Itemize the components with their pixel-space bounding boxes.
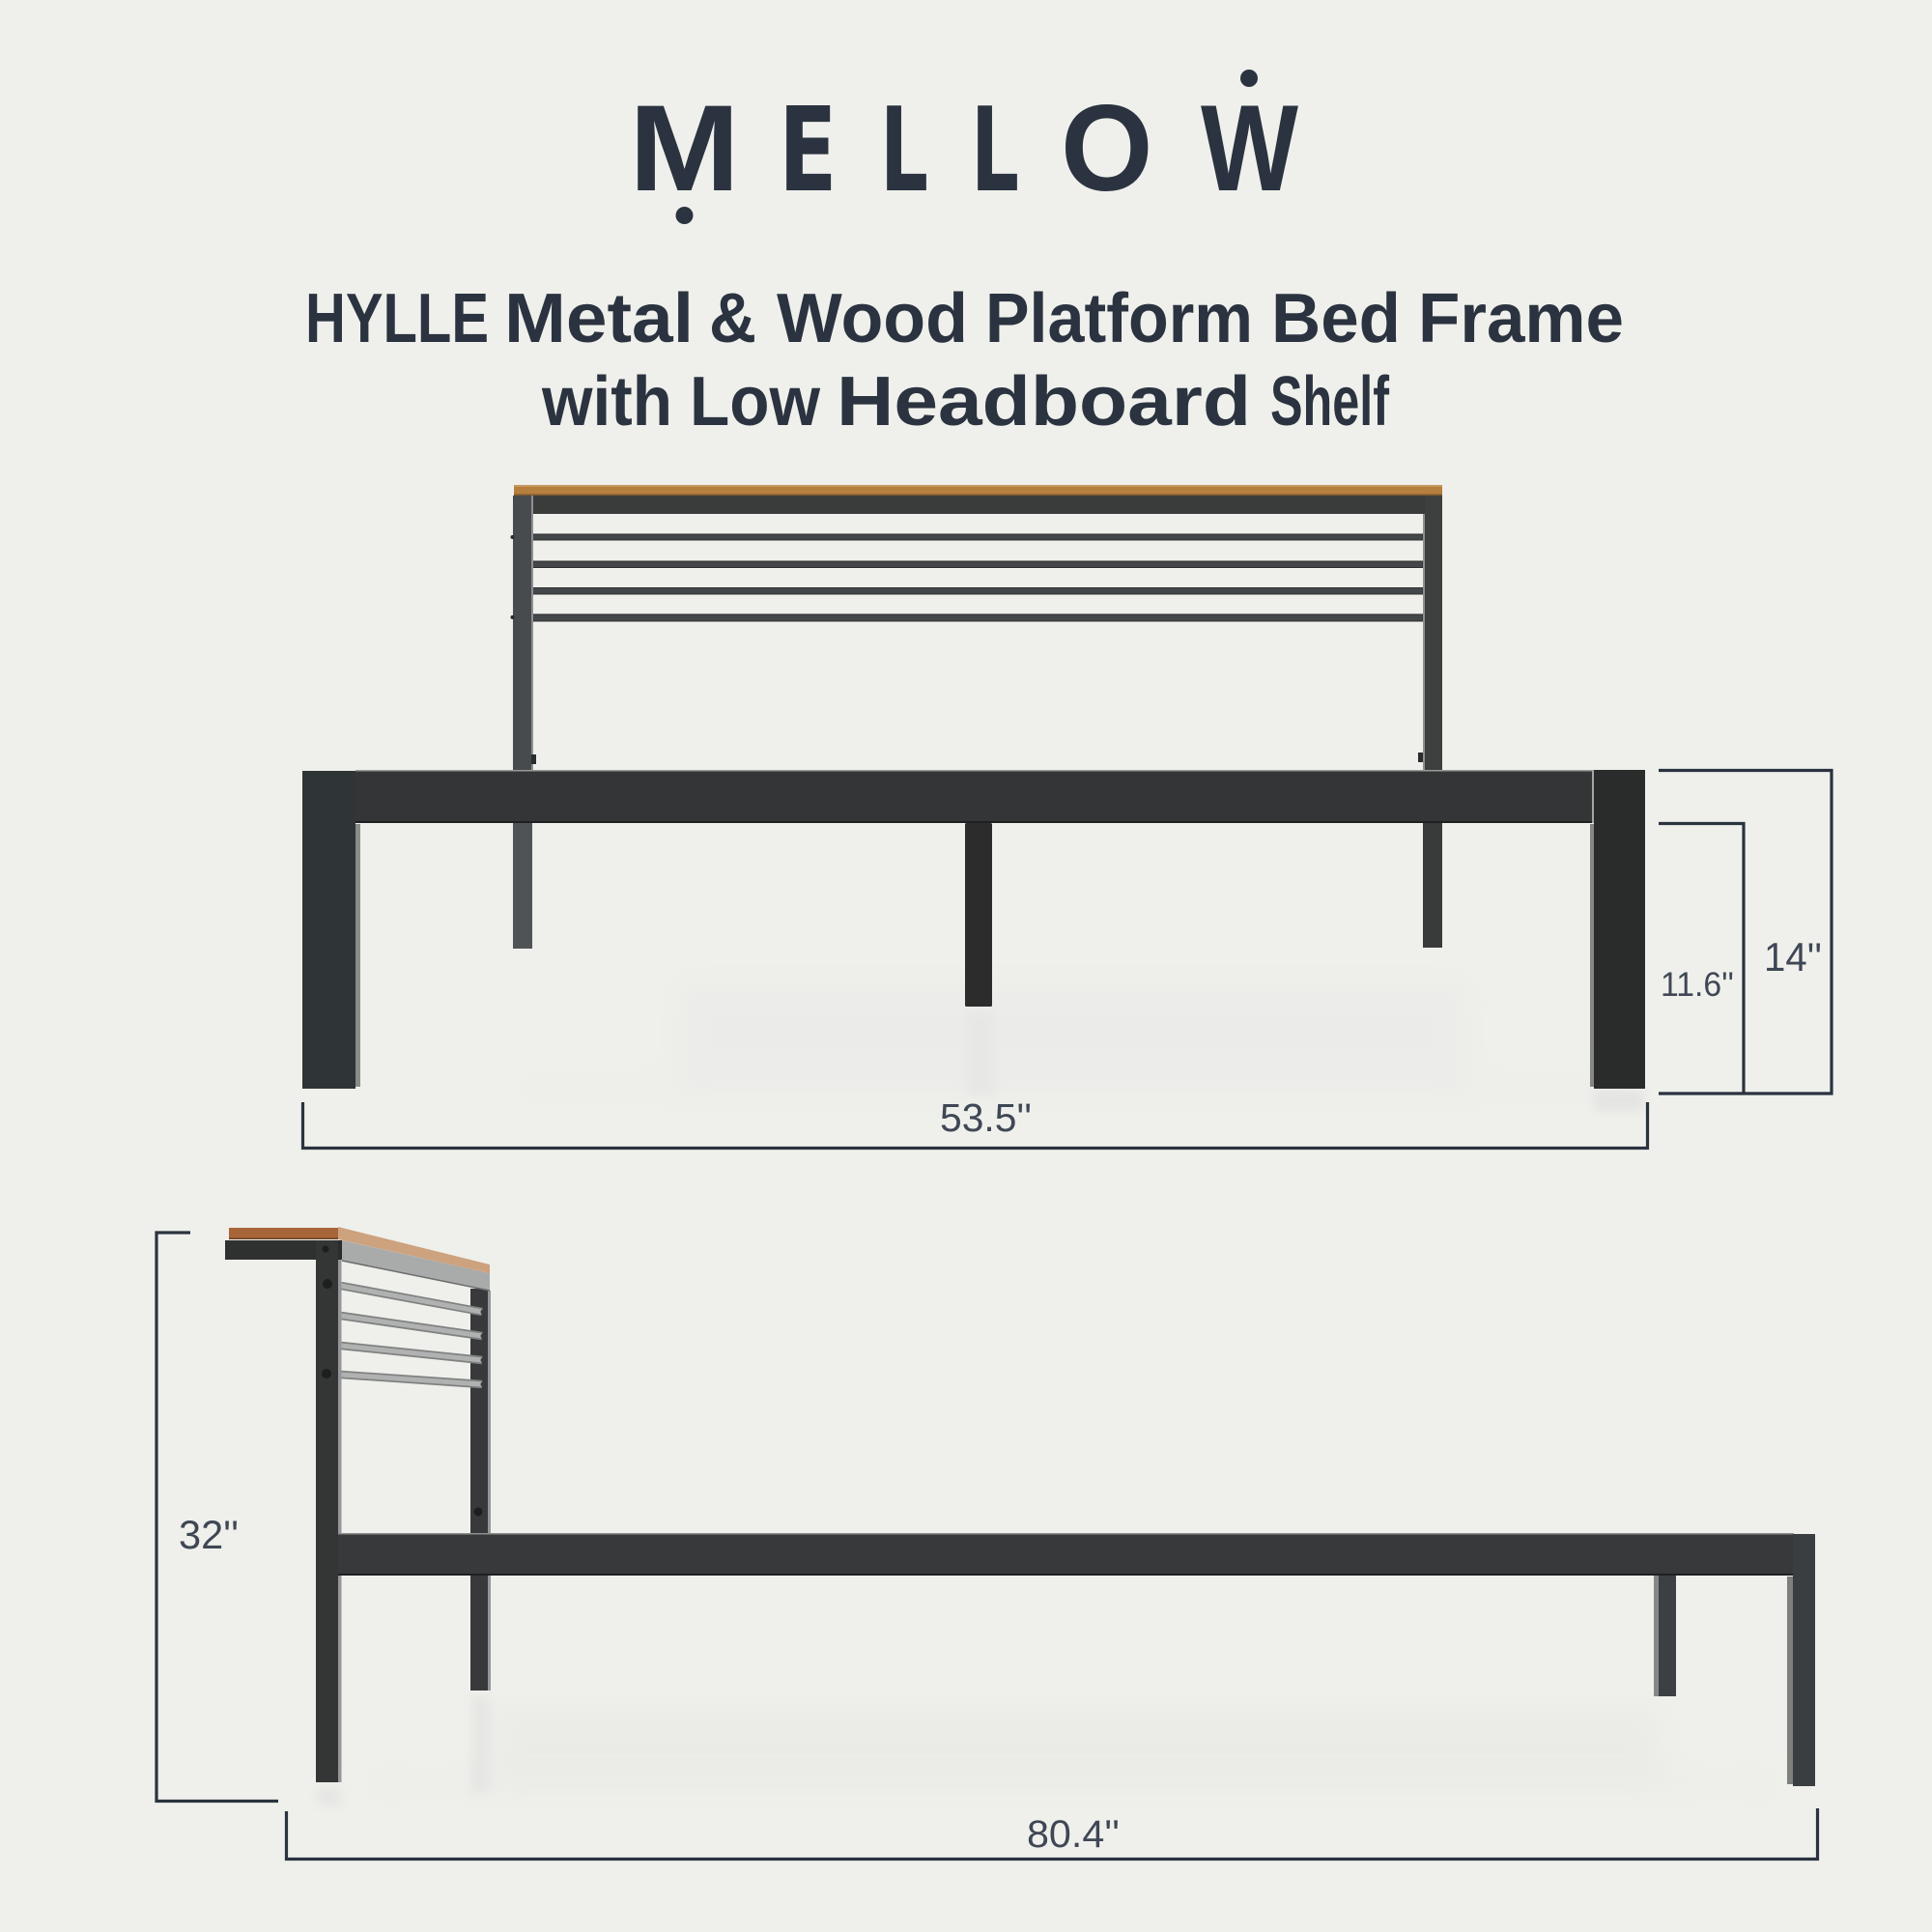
title: HYLLE <box>305 280 489 357</box>
title <box>305 280 1624 440</box>
logo: MELLOW wordmark: O <box>1061 79 1153 216</box>
title: & <box>709 280 756 357</box>
title: with <box>541 363 672 440</box>
dimension: clearance 11.6: 11.6'' <box>1661 966 1734 1004</box>
leg reflections <box>317 1696 491 1806</box>
rear inner legs <box>513 823 1442 949</box>
dimension: clearance 11.6 <box>1659 823 1744 1094</box>
wood shelf perspective <box>338 1227 490 1273</box>
logo: MELLOW wordmark: L <box>971 84 1019 218</box>
title: Wood <box>777 280 968 357</box>
angled slats <box>341 1286 482 1384</box>
far right leg <box>1787 1534 1815 1786</box>
dimension: height 14 <box>1659 771 1832 1094</box>
headboard <box>510 485 1442 770</box>
dimension: width 53.5: 53.5'' <box>940 1095 1032 1140</box>
dimension: headboard height 32 <box>156 1233 278 1801</box>
dimension: width 53.5 <box>303 1095 1648 1148</box>
wood shelf front <box>229 1228 338 1239</box>
title: Shelf <box>1270 363 1390 440</box>
title: Low <box>690 363 821 440</box>
title: Frame <box>1418 280 1624 357</box>
dimension: length 80.4: 80.4'' <box>1027 1813 1120 1856</box>
grey top bar <box>342 1240 490 1291</box>
headboard posts <box>513 496 1442 770</box>
shelf bracket <box>225 1240 338 1260</box>
rear headboard post <box>470 1289 488 1690</box>
dimension: length 80.4 <box>286 1808 1818 1859</box>
headboard top bar <box>531 496 1425 514</box>
side rail <box>338 1534 1794 1576</box>
title: Bed <box>1271 280 1401 357</box>
right front leg <box>1590 770 1645 1089</box>
dimension: height 14: 14'' <box>1764 934 1822 980</box>
logo: MELLOW wordmark: E <box>779 84 838 218</box>
center leg shadow <box>966 1012 995 1094</box>
title: Headboard <box>837 363 1251 440</box>
logo: MELLOW wordmark: L <box>880 84 928 218</box>
front view of bed frame <box>302 485 1645 1111</box>
dimension: headboard height 32: 32'' <box>179 1512 239 1557</box>
center leg <box>965 823 992 1007</box>
rear inner leg right <box>1654 1576 1676 1696</box>
title: Platform <box>985 280 1253 357</box>
left front leg <box>302 771 360 1089</box>
logo: MELLOW wordmark: M <box>629 79 740 216</box>
logo: MELLOW wordmark <box>629 70 1298 224</box>
logo: MELLOW wordmark: W <box>1201 79 1298 216</box>
side view of bed frame <box>225 1227 1815 1806</box>
wood shelf <box>514 485 1442 496</box>
right leg shadow <box>1594 1090 1644 1111</box>
front rail <box>355 771 1592 823</box>
title: Metal <box>504 280 694 357</box>
floor shadow: front view <box>522 980 1613 1094</box>
post bolts <box>322 1246 483 1517</box>
headboard slats <box>532 534 1423 621</box>
headboard brackets <box>510 535 1423 764</box>
front headboard post <box>316 1240 338 1782</box>
floor shadow: side view <box>367 1708 1777 1791</box>
slat end bolts <box>481 1310 485 1387</box>
